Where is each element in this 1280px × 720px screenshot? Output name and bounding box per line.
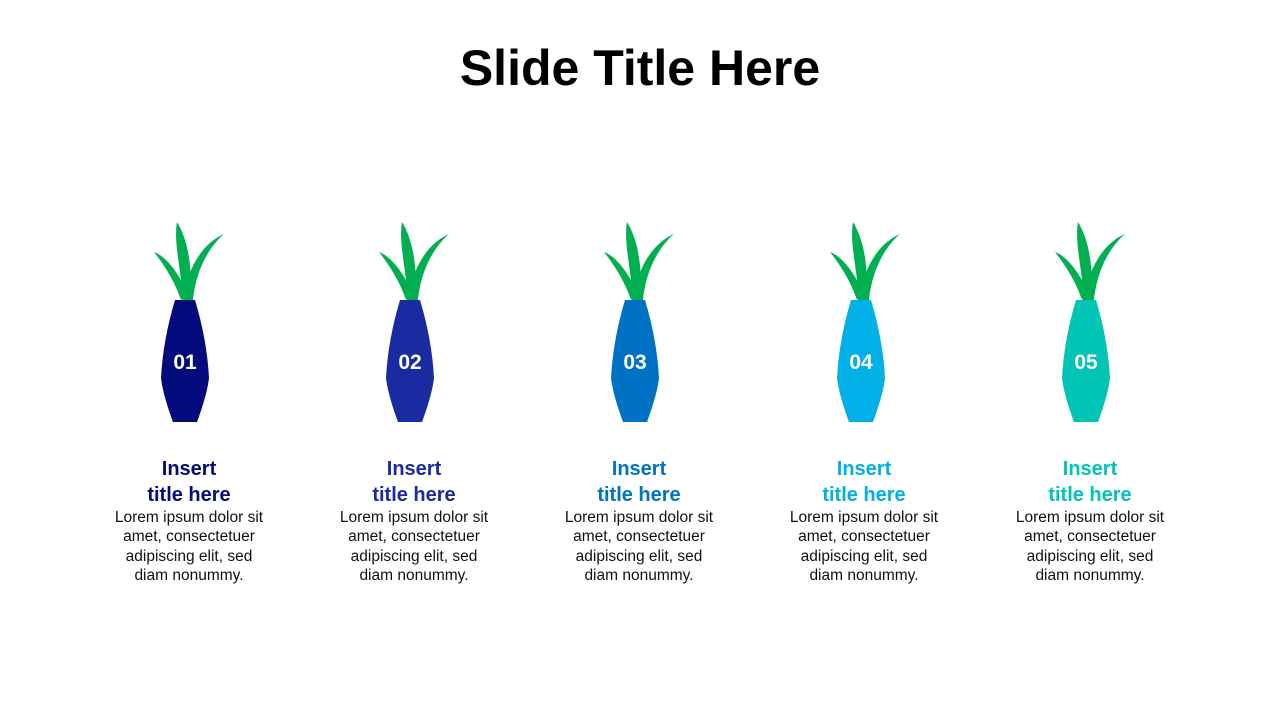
vase 05 <box>1055 222 1125 422</box>
text block 04: amet, consectetuer <box>798 528 930 545</box>
text block 02: Lorem ipsum dolor sit <box>340 509 488 526</box>
text block 02: adipiscing elit, sed <box>351 548 477 565</box>
text block 01: adipiscing elit, sed <box>126 548 252 565</box>
text block 04: Insert <box>837 458 891 480</box>
vase 02: 02 <box>398 351 422 374</box>
text block 01: amet, consectetuer <box>123 528 255 545</box>
text block 01: Insert <box>162 458 216 480</box>
text block 04: adipiscing elit, sed <box>801 548 927 565</box>
text block 05: adipiscing elit, sed <box>1027 548 1153 565</box>
vase 03 <box>604 222 674 422</box>
text block 02: Insert <box>387 458 441 480</box>
vase 04 <box>830 222 900 422</box>
text block 02: diam nonummy. <box>359 567 469 584</box>
text block 01: diam nonummy. <box>134 567 244 584</box>
text block 03: adipiscing elit, sed <box>576 548 702 565</box>
text block 01 <box>115 458 263 584</box>
text block 02 <box>340 458 488 584</box>
text block 03: diam nonummy. <box>584 567 694 584</box>
text block 04: title here <box>822 484 906 506</box>
text block 01: title here <box>147 484 231 506</box>
vase 02 <box>379 222 449 422</box>
text block 05: title here <box>1048 484 1132 506</box>
text block 05 <box>1016 458 1164 584</box>
text block 03: Lorem ipsum dolor sit <box>565 509 713 526</box>
text block 03: Insert <box>612 458 666 480</box>
text block 02: title here <box>372 484 456 506</box>
vase 03: 03 <box>623 351 647 374</box>
title: Slide Title Here <box>460 40 820 96</box>
vase 04: 04 <box>849 351 873 374</box>
text block 03 <box>565 458 713 584</box>
text block 04: Lorem ipsum dolor sit <box>790 509 938 526</box>
text block 04: diam nonummy. <box>809 567 919 584</box>
text block 04 <box>790 458 938 584</box>
text block 05: amet, consectetuer <box>1024 528 1156 545</box>
text block 05: Insert <box>1063 458 1117 480</box>
vase 05: 05 <box>1074 351 1098 374</box>
text block 03: title here <box>597 484 681 506</box>
text block 01: Lorem ipsum dolor sit <box>115 509 263 526</box>
text block 05: diam nonummy. <box>1035 567 1145 584</box>
text block 05: Lorem ipsum dolor sit <box>1016 509 1164 526</box>
vase 01 <box>154 222 224 422</box>
vase 01: 01 <box>173 351 197 374</box>
text block 02: amet, consectetuer <box>348 528 480 545</box>
text block 03: amet, consectetuer <box>573 528 705 545</box>
